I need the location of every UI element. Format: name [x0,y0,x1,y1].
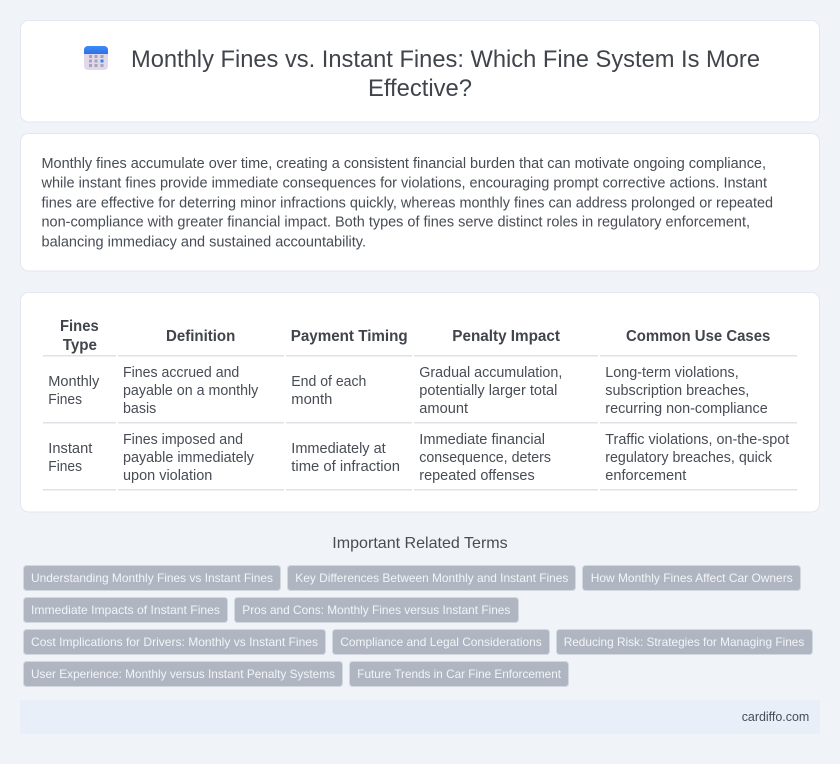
table row: monthly fines: End of each [291,374,366,390]
tag [24,566,280,590]
table row: monthly fines: potentially larger total [419,383,557,399]
icon: calendar [84,46,108,70]
tag: Understanding Monthly Fines vs Instant Fines [31,571,273,585]
table row: monthly fines: subscription breaches, [605,383,749,399]
tag [24,598,228,622]
table row: monthly fines: month [291,392,332,408]
tag: Cost Implications for Drivers: Monthly vs Instant Fines [31,635,318,649]
table row: instant fines [48,432,789,484]
table row: instant fines: time of infraction [291,459,400,475]
tag [24,662,342,686]
panel: comparison table [20,292,820,512]
table row: instant fines: payable immediately [123,450,255,466]
tag: Pros and Cons: Monthly Fines versus Instant Fines [242,603,510,617]
table row: instant fines: Instant [48,441,92,457]
footer [20,700,820,734]
table row: instant fines: regulatory breaches, quick [605,450,773,466]
text block: summary: while instant fines provide immediate consequences for violations, encouraging prompt corrective actions. Instant [40,176,767,192]
related terms tags [24,566,812,686]
table row: monthly fines: Monthly [48,374,100,390]
table row: instant fines: consequence, deters [419,450,551,466]
table header row: Payment Timing [291,328,408,345]
tag [350,662,568,686]
table row: monthly fines: amount [419,401,468,417]
table row: instant fines: Traffic violations, on-the-spot [605,432,789,448]
table row: instant fines: enforcement [605,468,686,484]
tag: Immediate Impacts of Instant Fines [31,603,220,617]
title [131,46,760,102]
tag: Key Differences Between Monthly and Instant Fines [295,571,568,585]
tag [332,630,550,654]
table row: monthly fines: Long-term violations, [605,365,739,381]
table header row: Penalty Impact [452,328,561,345]
table row: monthly fines: payable on a monthly [123,383,259,399]
table row: instant fines: Immediately at [291,441,386,457]
tag [24,630,326,654]
table header row [60,318,770,354]
tag: User Experience: Monthly versus Instant Penalty Systems [31,667,335,681]
title: Effective? [368,75,472,102]
tag [288,566,576,590]
footer: cardiffo.com [742,709,809,724]
table row: monthly fines: Fines accrued and [123,365,239,381]
table header row: Definition [166,328,235,345]
panel: header [20,20,820,122]
text block: summary: fines are effective for deterring minor infractions quickly, whereas monthly fines can address prolonged or repeated [42,196,773,212]
table row: monthly fines: basis [123,401,156,417]
table row: monthly fines [48,365,768,417]
tag: Reducing Risk: Strategies for Managing Fines [564,635,804,649]
tag: Compliance and Legal Considerations [340,635,542,649]
title: Monthly Fines vs. Instant Fines: Which Fine System Is More [131,46,760,73]
table header row: Common Use Cases [626,328,770,345]
tag: Future Trends in Car Fine Enforcement [357,667,562,681]
text block: summary [40,156,773,250]
table header row: Type [63,337,97,354]
table row: monthly fines: recurring non-compliance [605,401,768,417]
tag [556,630,812,654]
text block: summary: Monthly fines accumulate over time, creating a consistent financial burden that can motivate ongoing compliance, [42,156,766,172]
table row: instant fines: Fines imposed and [123,432,243,448]
heading: related terms: Important Related Terms [332,535,508,552]
table row: monthly fines: Gradual accumulation, [419,365,562,381]
tag [582,566,800,590]
text block: summary: balancing immediacy and sustained accountability. [42,234,366,250]
table row: instant fines: Immediate financial [419,432,545,448]
table row: instant fines: Fines [48,459,82,475]
panel: summary paragraph [20,134,820,271]
tag: How Monthly Fines Affect Car Owners [591,571,793,585]
table row: instant fines: repeated offenses [419,468,535,484]
text block: summary: non-compliance with greater financial impact. Both types of fines serve distinct roles in regulatory enforcement, [42,214,750,230]
table header row: Fines [60,318,99,335]
table row: monthly fines: Fines [48,392,82,408]
table row: instant fines: upon violation [123,468,212,484]
tag [234,598,518,622]
